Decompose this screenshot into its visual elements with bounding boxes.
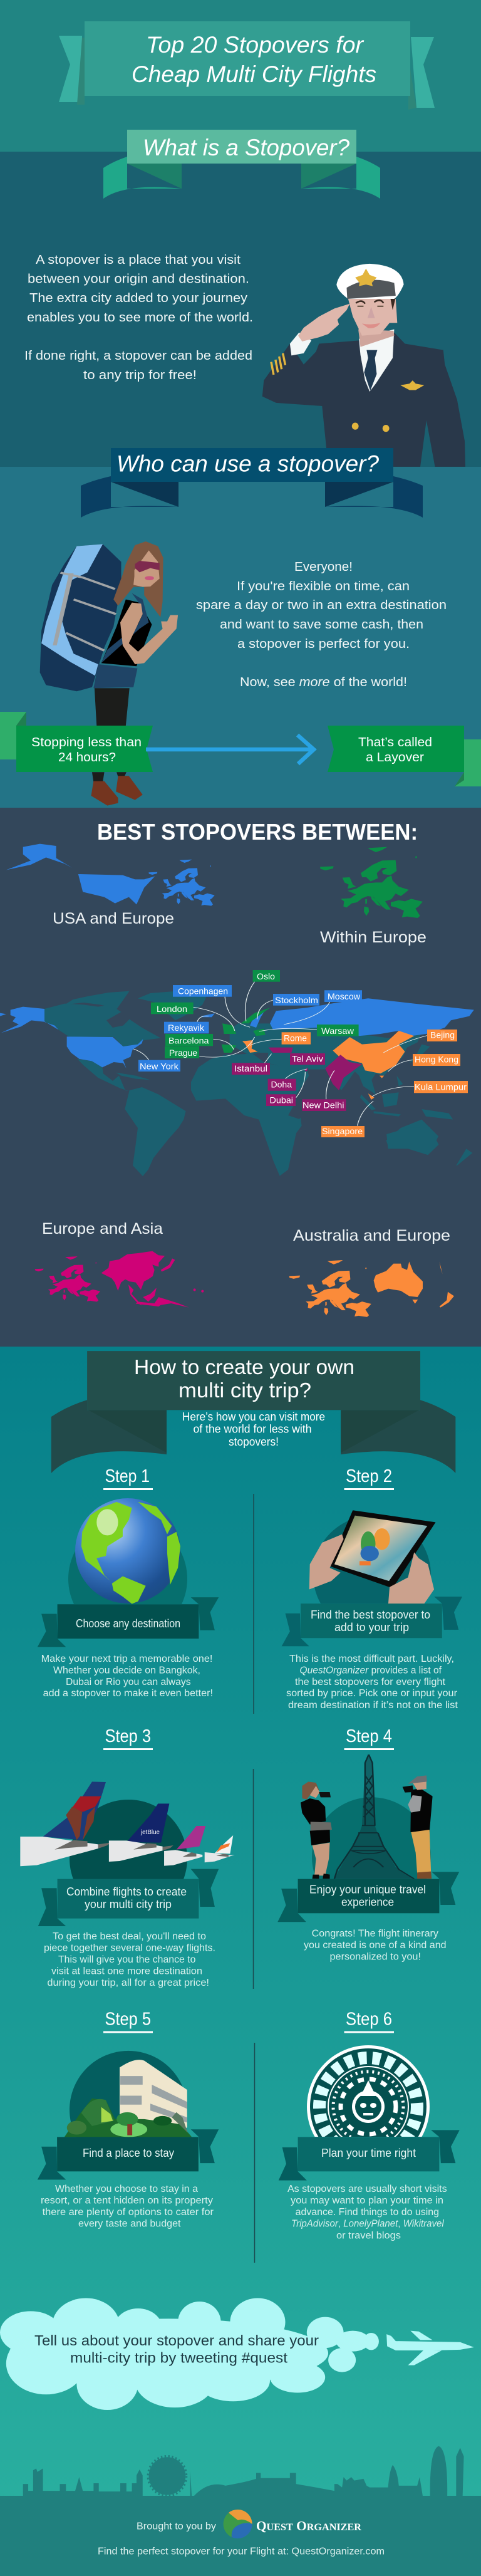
city label: Moscow: Moscow [328, 991, 361, 1001]
step description [304, 1929, 447, 1963]
city label: Warsaw [317, 1025, 359, 1036]
step heading: Step 6 [346, 2010, 392, 2030]
footer [98, 2510, 385, 2557]
text block: stopover definition [24, 253, 253, 382]
step heading: Step 2 [346, 1466, 392, 1486]
step description: there are plenty of options to cater for [43, 2207, 214, 2218]
city label: Rome [282, 1032, 311, 1045]
callout text: That’s called [358, 736, 432, 749]
callout text: multi-city trip by tweeting #quest [70, 2350, 288, 2366]
step description: This will give you the chance to [58, 1954, 195, 1965]
step description: the best stopovers for every flight [295, 1677, 446, 1687]
city label: Dubai: Dubai [269, 1095, 293, 1105]
step description [41, 2184, 214, 2229]
banner text: Enjoy your unique travel [309, 1884, 426, 1896]
panel: step 5 [38, 2010, 219, 2229]
step description: you may want to plan your time in [291, 2195, 443, 2206]
map label: Europe and Asia: Europe and Asia [42, 1220, 163, 1238]
city label: Kula Lumpur: Kula Lumpur [415, 1082, 467, 1092]
banner text [311, 1609, 430, 1634]
panel: step 1 [38, 1466, 219, 1699]
text block: stopover definition: enables you to see more of the world. [27, 311, 253, 325]
callout text [31, 736, 142, 764]
banner text: Combine flights to create [66, 1885, 187, 1898]
map label: within Europe: Within Europe [320, 929, 427, 946]
text block: stopover definition: If done right, a stopover can be added [24, 349, 252, 363]
map: Europe and Asia [35, 1251, 204, 1308]
panel: step 6 [279, 2010, 460, 2241]
step description: you created is one of a kind and [304, 1940, 447, 1951]
step heading: Step 5 [105, 2010, 151, 2030]
banner text [309, 1884, 426, 1909]
step description [287, 2184, 447, 2241]
step description [286, 1654, 458, 1711]
city label: Tel Aviv: Tel Aviv [292, 1053, 323, 1063]
step description: sorted by price. Pick one or input your [286, 1688, 457, 1699]
section background: best stopovers [0, 808, 481, 1347]
arrows [133, 982, 427, 1126]
banner text: Plan your time right [321, 2147, 416, 2159]
heading: best stopovers between: BEST STOPOVERS BETWEEN: [97, 819, 418, 845]
banner text: Find a place to stay [83, 2147, 174, 2159]
step description: This is the most difficult part. Luckily, [289, 1654, 454, 1664]
step banner [282, 1597, 462, 1646]
step description [41, 1654, 213, 1699]
city label: Prague: Prague [169, 1048, 197, 1058]
step description: Congrats! The flight itinerary [312, 1929, 438, 1939]
city label: Dubai [266, 1094, 296, 1106]
step description: every taste and budget [78, 2219, 181, 2229]
step description: piece together several one-way flights. [44, 1942, 215, 1953]
city label: Rekyavik: Rekyavik [168, 1023, 205, 1033]
icon: saluting pilot [262, 264, 465, 467]
banner text: add to your trip [334, 1621, 409, 1634]
map: USA and Europe [6, 844, 215, 906]
city label: Rome: Rome [284, 1033, 307, 1043]
city label: Warsaw: Warsaw [321, 1026, 354, 1036]
icon: Eiffel Tower and photographers [301, 1755, 433, 1879]
map: within Europe [320, 847, 423, 918]
map: Australia and Europe [289, 1260, 454, 1317]
text block: intro [182, 1411, 325, 1448]
panel: step 3 [20, 1726, 235, 1988]
icon: airplane [386, 2331, 474, 2365]
section background: title [0, 0, 481, 152]
callout text: Stopping less than [31, 736, 142, 749]
city label: Hong Kong: Hong Kong [415, 1055, 458, 1065]
title text: Top 20 Stopovers for [146, 32, 365, 58]
step description: TripAdvisor, LonelyPlanet, Wikitravel [291, 2219, 444, 2229]
step banner [38, 1597, 219, 1647]
city label: Bejing: Bejing [430, 1030, 455, 1040]
arrow: stopover to layover [146, 735, 314, 764]
step description: during your trip, all for a great price! [47, 1978, 209, 1988]
logo: Quest Organizer [224, 2510, 361, 2538]
icon: hotel and tent [65, 2060, 192, 2137]
heading text: How to create your own [134, 1355, 354, 1379]
text block: stopover definition: between your origin and destination. [28, 272, 249, 286]
world map with stopover cities [0, 970, 474, 1176]
text block: intro: Here’s how you can visit more [182, 1411, 325, 1423]
heading ribbon: what is a stopover [103, 130, 380, 199]
callout text [34, 2332, 319, 2366]
step description: Whether you decide on Bangkok, [53, 1666, 200, 1676]
tail logo text: jetBlue [140, 1829, 160, 1836]
city label: Barcelona [165, 1034, 213, 1046]
step description: resort, or a tent hidden on its property [41, 2195, 213, 2206]
map label: Australia and Europe: Australia and Europe [293, 1227, 450, 1244]
city label: Istanbul [232, 1063, 270, 1075]
city label: Doha: Doha [271, 1080, 292, 1090]
text block: stopover definition: A stopover is a place that you visit [36, 253, 240, 267]
step description: As stopovers are usually short visits [287, 2184, 447, 2194]
section background: what is a stopover [0, 152, 481, 467]
divider lines [253, 1494, 254, 2263]
step banner [279, 2130, 460, 2181]
step description: Make your next trip a memorable one! [41, 1654, 212, 1664]
text block: intro: stopovers! [229, 1436, 279, 1448]
callout text: a Layover [366, 751, 424, 764]
city label: Stockholm: Stockholm [275, 995, 318, 1005]
callout text: Tell us about your stopover and share your [34, 2332, 319, 2349]
step description: Whether you choose to stay in a [55, 2184, 198, 2194]
step description: dream destination if it’s not on the list [288, 1700, 458, 1711]
heading text [134, 1355, 354, 1402]
brought to you by: Brought to you by [137, 2521, 216, 2532]
icon: globe [75, 1498, 180, 1603]
city label: Doha [268, 1079, 296, 1091]
city label: Istanbul: Istanbul [234, 1063, 267, 1073]
city label: Bejing [427, 1030, 457, 1041]
step description: To get the best deal, you'll need to [53, 1931, 206, 1942]
banner text: your multi city trip [85, 1898, 172, 1911]
text block: stopover definition: The extra city added to your journey [29, 291, 247, 305]
text block: everyone: Everyone! [294, 560, 353, 574]
heading ribbon: how to create your own multi city trip [51, 1351, 455, 1473]
panel: step 2 [282, 1466, 462, 1711]
callout ribbon: that's called a layover [328, 726, 481, 786]
text block: everyone: If you're flexible on time, can [237, 580, 410, 593]
section background: who can use [0, 467, 481, 808]
heading ribbon: who can use a stopover [81, 448, 423, 518]
step banner [38, 1869, 219, 1926]
title text: Cheap Multi City Flights [132, 61, 376, 87]
step description [44, 1931, 215, 1988]
city label: London: London [157, 1004, 187, 1014]
heading text: multi city trip? [178, 1379, 311, 1402]
step description: or travel blogs [336, 2230, 401, 2241]
callout ribbon: stopping less than 24 hours [0, 712, 153, 772]
icon: Mayan calendar [307, 2045, 430, 2137]
city label: Prague [165, 1046, 199, 1058]
city label: Barcelona: Barcelona [168, 1036, 209, 1046]
callout: cloud trail [0, 2298, 379, 2410]
text block: everyone: a stopover is perfect for you. [237, 637, 410, 651]
step banner [277, 1872, 459, 1922]
step heading: Step 1 [105, 1466, 150, 1486]
step description: QuestOrganizer provides a list of [299, 1666, 442, 1676]
banner text: experience [341, 1896, 394, 1909]
section background: how to [0, 1347, 481, 2496]
step description: personalized to you! [329, 1952, 421, 1963]
icon: backpacker [40, 541, 178, 806]
map label: USA and Europe: USA and Europe [53, 910, 174, 927]
text block: intro: of the world for less with [193, 1423, 312, 1436]
step description: Dubai or Rio you can always [66, 1677, 191, 1687]
banner text: Find the best stopover to [311, 1609, 430, 1621]
title text [132, 32, 376, 87]
title banner [59, 21, 435, 110]
city label: London [151, 1003, 194, 1014]
banner text [66, 1885, 187, 1911]
city label: Copenhagen: Copenhagen [178, 986, 228, 996]
panel: step 4 [277, 1726, 459, 1963]
city label: New York: New York [140, 1061, 179, 1071]
text block: everyone: Now, see more of the world! [240, 675, 407, 689]
icon: tablet in hands [309, 1510, 436, 1606]
text block: everyone [196, 560, 447, 689]
heading text: What is a Stopover? [143, 135, 349, 160]
step description: visit at least one more destination [51, 1966, 202, 1976]
heading text: Who can use a stopover? [116, 451, 379, 476]
text block: stopover definition: to any trip for free! [83, 368, 197, 382]
city label: Oslo: Oslo [257, 971, 275, 981]
logo: Quest Organizer: QUEST ORGANIZER [256, 2518, 361, 2533]
step banner [38, 2129, 219, 2180]
city label: Singapore: Singapore [322, 1126, 363, 1136]
banner text: Choose any destination [76, 1617, 180, 1630]
text block: everyone: spare a day or two in an extra destination [196, 598, 447, 612]
callout text [358, 736, 432, 764]
callout text: 24 hours? [58, 751, 116, 764]
icon: airline tails [20, 1781, 235, 1866]
land masses: Americas and Russia [0, 991, 209, 1176]
city label: Oslo [253, 970, 280, 982]
step description: advance. Find things to do using [296, 2207, 439, 2218]
section background: footer [0, 2496, 481, 2576]
city label: New Delhi: New Delhi [303, 1100, 344, 1110]
step heading: Step 3 [105, 1726, 151, 1746]
step description: add a stopover to make it even better! [43, 1688, 213, 1699]
text block: everyone: and want to save some cash, then [220, 618, 423, 632]
land masses: Eurasia and Africa [191, 1023, 453, 1176]
skyline silhouette [0, 2446, 481, 2500]
step heading: Step 4 [346, 1726, 392, 1746]
city label: Rekyavik [164, 1022, 209, 1033]
footer link text: Find the perfect stopover for your Flight at: QuestOrganizer.com [98, 2547, 385, 2557]
